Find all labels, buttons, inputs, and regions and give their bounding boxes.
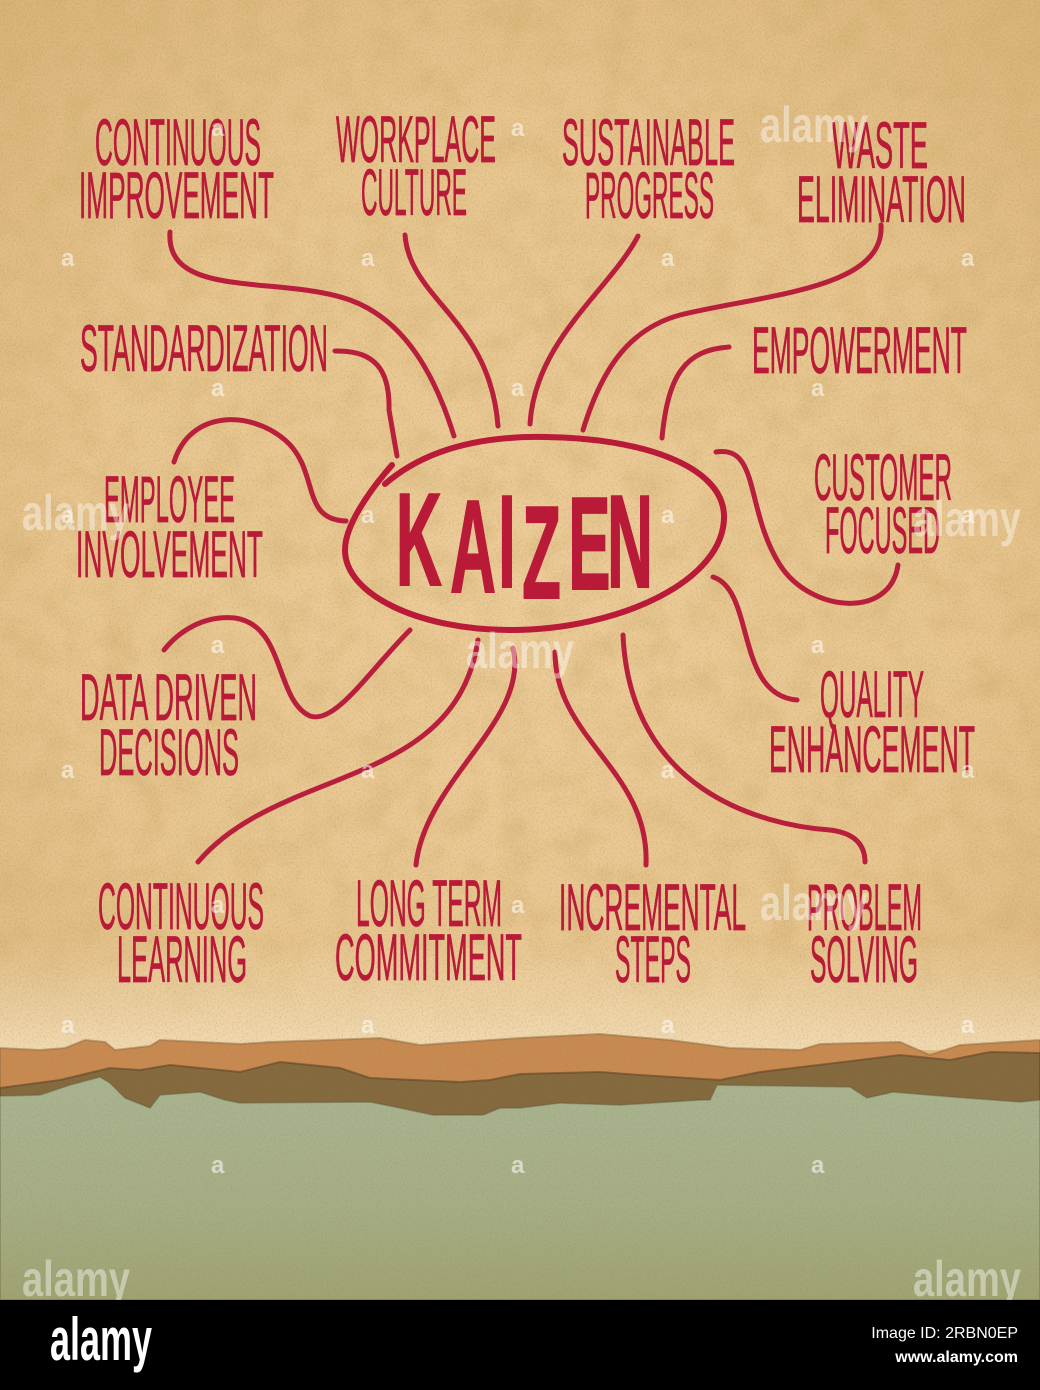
- watermarks: alamy: [22, 485, 130, 541]
- watermarks: a: [361, 1012, 375, 1039]
- watermarks: a: [211, 115, 225, 142]
- watermarks: alamy: [760, 875, 868, 931]
- watermarks: a: [511, 115, 525, 142]
- watermarks: a: [661, 245, 675, 272]
- infographic canvas: DATA DRIVEN: [80, 660, 257, 734]
- label: employee involvement: [76, 462, 263, 591]
- watermarks: a: [811, 1152, 825, 1179]
- label: customer focused: [814, 440, 952, 567]
- watermarks: a: [961, 757, 975, 784]
- watermarks: a: [661, 757, 675, 784]
- watermarks: a: [961, 502, 975, 529]
- infographic canvas: WORKPLACE: [336, 102, 496, 176]
- label: sustainable progress: [562, 105, 735, 232]
- label: incremental steps: [559, 870, 746, 996]
- watermarks: alamy: [22, 1251, 130, 1307]
- watermarks: a: [211, 892, 225, 919]
- central title: KAIZEN: KAIZEN: [396, 465, 653, 626]
- watermarks: a: [61, 757, 75, 784]
- watermarks: a: [61, 245, 75, 272]
- brown paper layer: [0, 1052, 1040, 1130]
- green paper layer: [0, 1077, 1040, 1300]
- watermarks: a: [361, 245, 375, 272]
- pale lower paper edge: [0, 940, 1040, 1050]
- infographic canvas: PROGRESS: [585, 158, 714, 232]
- orange paper layer: [0, 1034, 1040, 1120]
- watermarks: a: [61, 502, 75, 529]
- footer site URL: www.alamy.com: [894, 1349, 1018, 1366]
- label: workplace culture: [336, 102, 496, 229]
- watermarks: a: [361, 757, 375, 784]
- infographic canvas: CULTURE: [361, 155, 467, 229]
- watermarks: a: [811, 375, 825, 402]
- watermarks: a: [211, 632, 225, 659]
- infographic canvas: LEARNING: [117, 922, 247, 996]
- infographic canvas: INVOLVEMENT: [76, 517, 263, 591]
- label: problem solving: [807, 870, 922, 996]
- infographic canvas: LONG TERM: [356, 866, 502, 940]
- infographic canvas: INCREMENTAL: [559, 870, 746, 944]
- label: continuous learning: [98, 869, 264, 996]
- infographic canvas: STANDARDIZATION: [80, 311, 328, 385]
- watermarks: a: [961, 245, 975, 272]
- label: continuous improvement: [79, 105, 274, 232]
- watermarks: a: [211, 375, 225, 402]
- paper texture: [0, 0, 1040, 1050]
- watermarks: alamy: [466, 623, 574, 679]
- watermarks: a: [511, 375, 525, 402]
- paper background: [0, 0, 1040, 1070]
- watermarks: alamy: [760, 97, 868, 153]
- footer logo: alamy: alamy: [50, 1306, 152, 1373]
- footer image ID: Image ID: 2RBN0EP: [871, 1325, 1018, 1342]
- infographic canvas: EMPLOYEE: [104, 462, 235, 536]
- watermarks: a: [511, 892, 525, 919]
- label: incremental steps: STEPS: [615, 922, 691, 996]
- infographic canvas: IMPROVEMENT: [79, 158, 274, 232]
- infographic canvas: COMMITMENT: [335, 920, 522, 994]
- watermarks: a: [961, 1012, 975, 1039]
- footer bar: [0, 1300, 1040, 1390]
- connector lines: [164, 225, 898, 865]
- watermarks: a: [661, 502, 675, 529]
- watermarks: a: [361, 502, 375, 529]
- watermarks: a: [811, 632, 825, 659]
- central oval: [345, 437, 724, 630]
- watermarks: a: [511, 1152, 525, 1179]
- label: data driven decisions: [80, 660, 257, 789]
- label: long term commitment: [335, 866, 522, 994]
- infographic canvas: SUSTAINABLE: [562, 105, 735, 179]
- watermarks: a: [211, 1152, 225, 1179]
- infographic canvas: DECISIONS: [99, 715, 239, 789]
- watermarks: a: [61, 1012, 75, 1039]
- infographic canvas: CONTINUOUS: [95, 105, 261, 179]
- label: quality enhancement: [769, 657, 975, 786]
- watermarks: a: [661, 1012, 675, 1039]
- label: waste elimination: [797, 108, 966, 236]
- infographic canvas: CONTINUOUS: [98, 869, 264, 943]
